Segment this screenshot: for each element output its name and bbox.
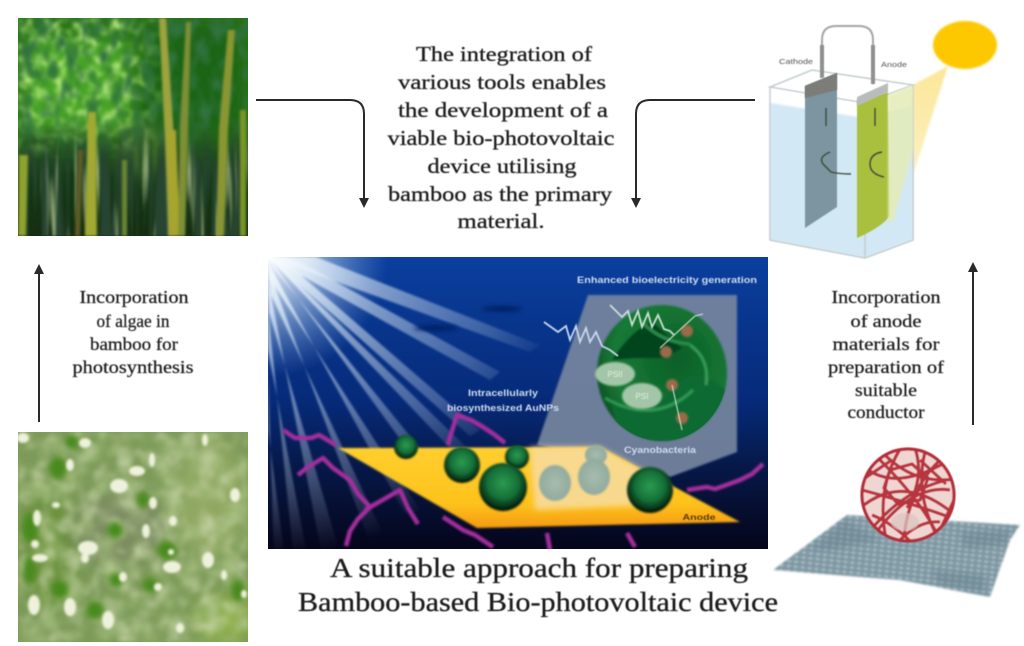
text: integration statement [388, 42, 614, 233]
photon wave 2 [610, 305, 674, 335]
anode top [857, 83, 888, 106]
text: integration statement: bamboo as the primary [388, 182, 613, 206]
PSII label: PSII [607, 370, 623, 379]
cathode top [805, 73, 837, 98]
photo: bamboo forest [18, 18, 248, 236]
sphere 1 [394, 435, 418, 459]
text: anode incorporation: of anode [850, 311, 922, 331]
PSII disc [595, 362, 635, 386]
text: integration statement: the development of a [398, 98, 609, 122]
pale overlap beside anode [888, 85, 913, 222]
PSI label: PSI [636, 392, 648, 401]
label: Enhanced bioelectricity generation: Enhanced bioelectricity generation [577, 275, 757, 285]
text: anode incorporation: preparation of [828, 357, 944, 377]
spheres: cyanobacteria on anode [394, 435, 673, 513]
electron path [660, 314, 703, 430]
text: anode incorporation: conductor [848, 402, 925, 422]
text: algae incorporation [72, 287, 194, 377]
arrow: cell to central text [631, 100, 755, 208]
sphere 3 [505, 445, 529, 469]
text: algae incorporation: bamboo for [90, 334, 178, 354]
background: deep blue water [268, 257, 768, 549]
text: integration statement: viable bio-photovoltaic [388, 126, 614, 150]
panel: zoomed inset wedge [537, 295, 737, 477]
dark ripples [414, 306, 522, 331]
label: Anode: Anode [881, 60, 907, 69]
title: Bamboo-based Bio-photovoltaic device [298, 587, 778, 617]
label: Cyanobacteria: Cyanobacteria [624, 445, 697, 455]
wire sphere [861, 448, 955, 544]
magnified cyanobacterium cell [595, 305, 727, 441]
light rays [268, 257, 540, 570]
magenta conductive network [283, 415, 763, 550]
label: Cathode: Cathode [779, 57, 813, 66]
electrode stems [822, 45, 873, 84]
central illustration: bio-photovoltaic scene [268, 257, 768, 570]
sun [933, 21, 997, 69]
label: biosynthesized AuNPs: biosynthesized AuNPs [447, 403, 559, 413]
electron carriers [660, 325, 693, 424]
arrow: bamboo to central text [256, 100, 369, 208]
photon wave 1 [544, 322, 618, 356]
sphere 2 [444, 447, 480, 483]
anode plate [857, 92, 890, 238]
cathode plate [805, 73, 837, 228]
sphere 7 pale [578, 459, 610, 495]
photo: algae surface [17, 432, 255, 644]
arrow: graphene up to cell [968, 262, 978, 425]
label: Intracellularly: Intracellularly [468, 388, 538, 398]
light zone on anode [530, 447, 670, 510]
sphere 5 pale [539, 465, 571, 501]
light beam [893, 66, 948, 222]
text: integration statement: The integration of [416, 42, 592, 66]
arrow: algae up to bamboo [34, 264, 44, 422]
sphere 4 [479, 463, 527, 511]
text: integration statement: various tools enables [398, 70, 606, 94]
diagram: electrochemical cell with sun [770, 21, 997, 258]
sphere 8 [627, 467, 673, 513]
tank edges [770, 70, 913, 258]
title: A suitable approach for preparing [330, 553, 748, 583]
PSI disc [622, 383, 662, 409]
diagram: anode material sphere on graphene sheet [773, 448, 1020, 597]
anode plate [338, 447, 740, 528]
text: integration statement: device utilising [428, 154, 577, 178]
water body [770, 103, 913, 258]
wire [822, 26, 873, 84]
title [298, 553, 778, 617]
text: anode incorporation: materials for [832, 334, 940, 354]
text: algae incorporation: photosynthesis [72, 357, 194, 377]
text: integration statement: material. [458, 209, 544, 233]
text: algae incorporation: Incorporation [80, 287, 189, 307]
text: anode incorporation: suitable [855, 380, 917, 400]
reaction arrows [822, 108, 884, 177]
text: algae incorporation: of algae in [96, 311, 170, 331]
text: anode incorporation: Incorporation [832, 287, 941, 307]
text: anode incorporation [828, 287, 944, 422]
glow [268, 257, 382, 370]
label: Anode: Anode [682, 512, 716, 522]
graphene sheet [773, 515, 1020, 597]
sheet shading [810, 520, 1010, 592]
sphere 6 pale [585, 445, 607, 465]
